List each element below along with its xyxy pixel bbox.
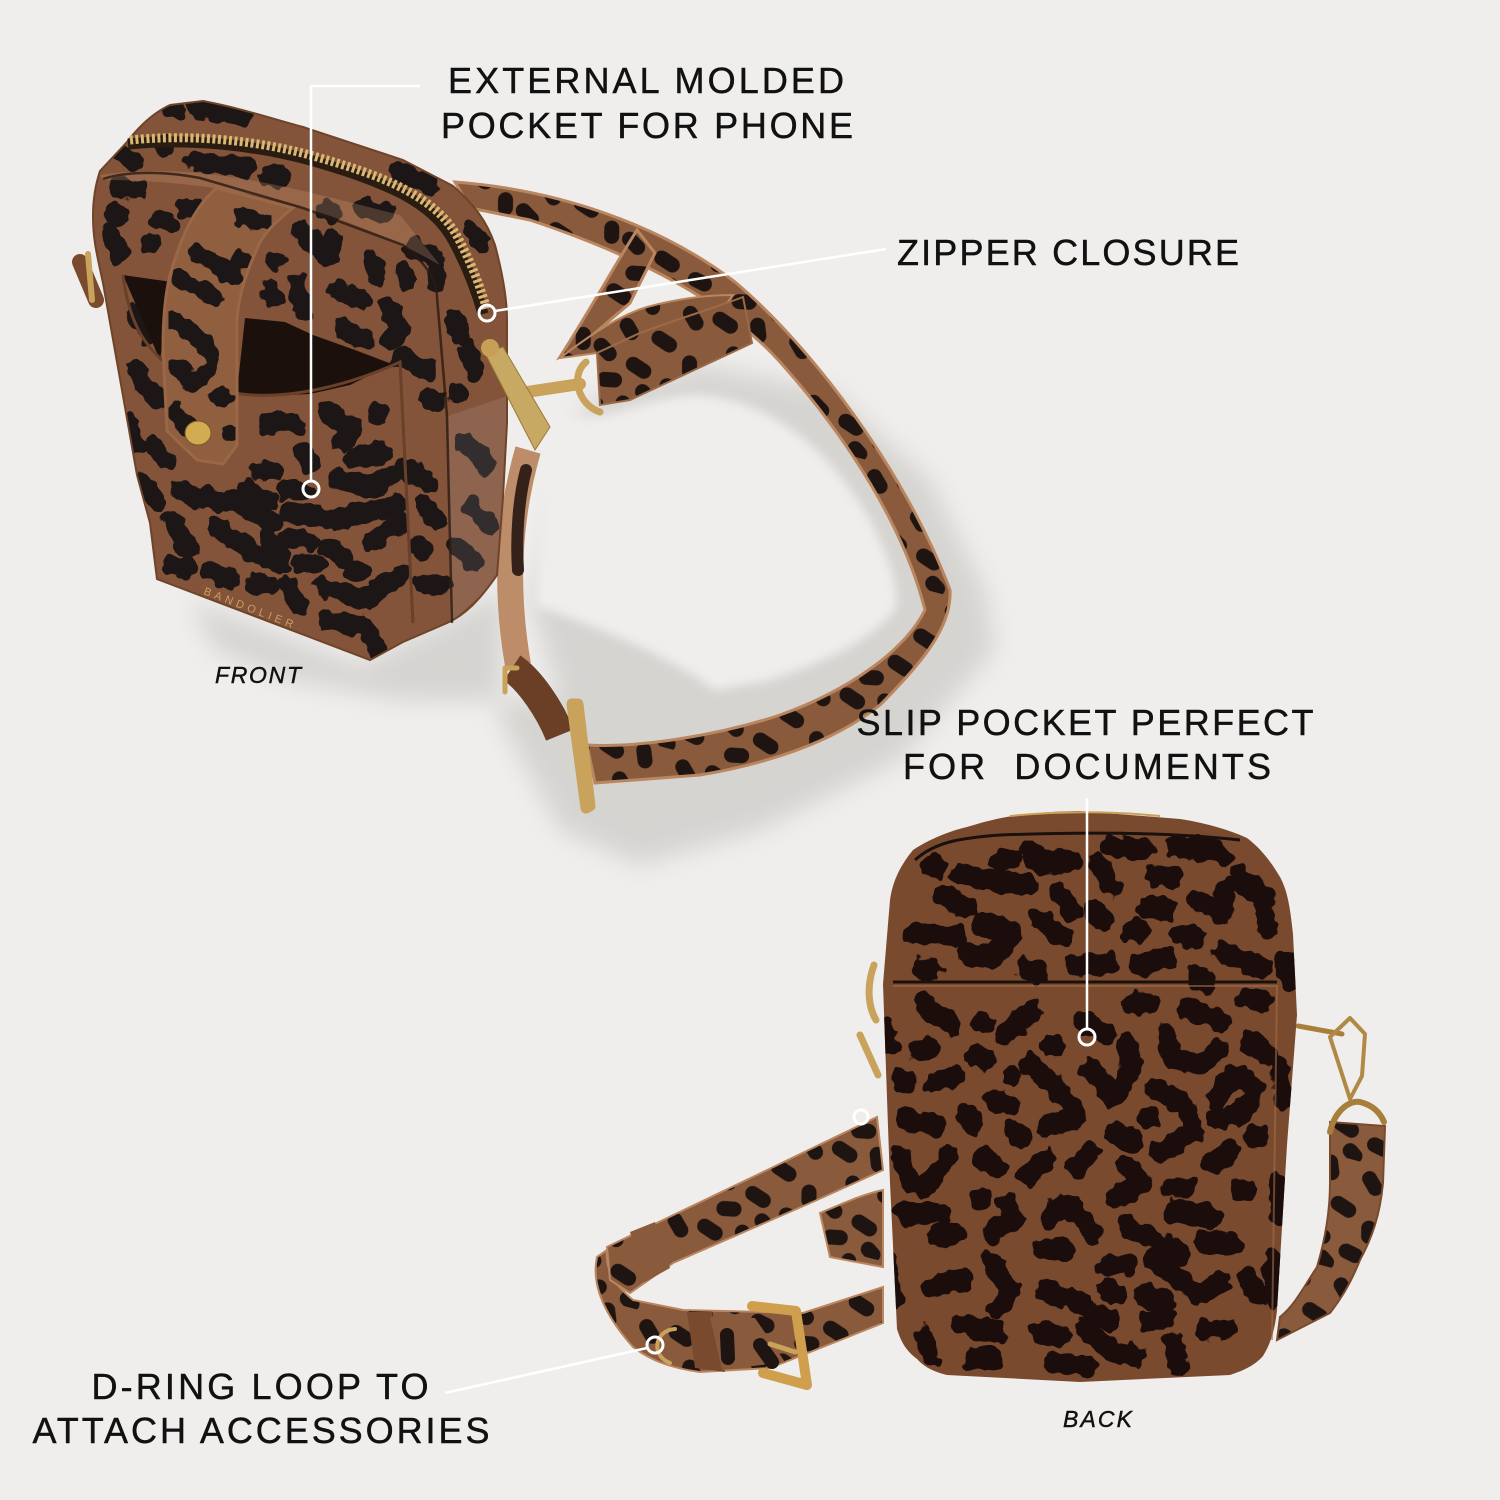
buckle bar (572, 704, 590, 808)
tan strap descending (510, 450, 528, 665)
callout: slip pocket: FOR DOCUMENTS (903, 746, 1271, 787)
panel seam (103, 173, 452, 623)
callout: external molded pocket: EXTERNAL MOLDED (448, 60, 844, 101)
strap tip (710, 1317, 785, 1370)
upper keeper (630, 1222, 670, 1282)
loop inner face (560, 295, 733, 358)
keeper knot (512, 668, 560, 735)
label: back: BACK (1063, 1406, 1134, 1432)
left tab clasp (80, 262, 96, 300)
main strap band (455, 182, 950, 783)
ring (578, 362, 600, 412)
callout: zipper closure: ZIPPER CLOSURE (897, 232, 1239, 273)
right hook (1330, 1018, 1365, 1099)
right loop (1330, 1102, 1384, 1132)
top band sheen (100, 171, 440, 265)
d-ring (657, 1329, 675, 1363)
pocket edge (123, 275, 413, 623)
leather base (94, 104, 506, 659)
front strap (455, 182, 950, 783)
callout: slip pocket: SLIP POCKET PERFECT (856, 702, 1314, 743)
lobster clasp (527, 384, 580, 392)
callout: external molded pocket (303, 60, 853, 497)
loop outer face (597, 297, 752, 405)
tab (164, 190, 290, 462)
rising strap (560, 230, 655, 357)
front hardware (80, 254, 600, 808)
slip pocket edge (893, 980, 1277, 984)
callout: slip pocket (856, 702, 1314, 1045)
leather base (875, 805, 1305, 1390)
callout: d-ring loop (32, 1337, 663, 1451)
zipper pull (481, 339, 550, 450)
upper strap band (607, 1117, 883, 1293)
right clip ring (1298, 1026, 1342, 1034)
d-ring (505, 668, 517, 692)
lower strap band (596, 1250, 883, 1372)
leopard spots (885, 846, 1290, 1367)
lit ground inside strap loop (535, 395, 896, 690)
zipper edge (1010, 812, 1160, 816)
callout: external molded pocket: POCKET FOR PHONE (441, 105, 853, 146)
right strap (1277, 1122, 1385, 1340)
back strap (596, 1117, 1385, 1372)
bag outline (93, 101, 507, 660)
buckle pin (770, 1344, 795, 1352)
back hardware (657, 965, 1384, 1385)
top seam (915, 833, 1240, 860)
left clips (860, 965, 878, 1075)
remnant ring (854, 1110, 868, 1124)
callout: d-ring loop: ATTACH ACCESSORIES (32, 1410, 490, 1451)
snap (185, 421, 211, 445)
lower keeper (687, 1312, 725, 1372)
label: front: FRONT (215, 662, 303, 688)
pocket interior (123, 275, 392, 396)
callout: d-ring loop: D-RING LOOP TO (92, 1366, 428, 1407)
tab outline (163, 188, 293, 464)
leopard spots (110, 107, 490, 649)
small loop behind bag (820, 1190, 883, 1267)
right gusset highlight (448, 395, 510, 623)
callout: zipper closure (479, 232, 1239, 321)
back bag (875, 805, 1305, 1390)
buckle (752, 1306, 807, 1385)
zipper tape (128, 142, 483, 314)
shadow: front bag and strap (190, 365, 995, 865)
front bag (80, 90, 520, 670)
zipper teeth (130, 138, 487, 310)
brand mark: BANDOLIER (202, 586, 295, 631)
